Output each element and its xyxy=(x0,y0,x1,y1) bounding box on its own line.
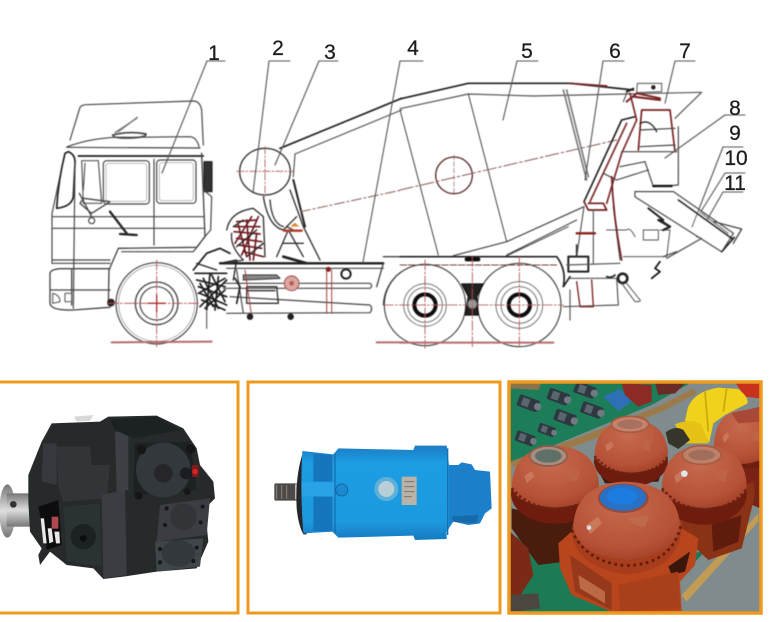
rear wheels xyxy=(384,264,466,346)
number 7: 7 xyxy=(679,40,691,63)
number 9: 9 xyxy=(729,122,741,145)
number 6: 6 xyxy=(609,40,621,63)
panel border xyxy=(509,382,761,613)
front bearing circle xyxy=(240,148,290,195)
lower plates xyxy=(157,498,210,542)
front wheel xyxy=(116,263,197,344)
motor body xyxy=(301,446,449,540)
chassis frame xyxy=(220,260,383,267)
cab roof xyxy=(70,101,203,145)
hopper xyxy=(638,110,675,152)
callout numbers xyxy=(208,37,748,195)
top valve xyxy=(74,415,93,422)
shaft flange xyxy=(0,484,15,538)
number 5: 5 xyxy=(521,40,533,63)
drum front xyxy=(280,98,402,148)
back right reducer xyxy=(678,482,755,560)
back left reducer xyxy=(512,485,602,565)
front reducer dome xyxy=(572,522,682,574)
back middle reducer xyxy=(593,462,665,483)
engine junction tangle xyxy=(193,248,230,273)
number 2: 2 xyxy=(272,37,284,60)
floor xyxy=(510,382,760,613)
number 4: 4 xyxy=(407,37,419,60)
panel: red planetary reducers photo xyxy=(509,381,773,613)
pump illustration xyxy=(0,415,215,579)
green shelf xyxy=(510,382,692,463)
number 1: 1 xyxy=(208,42,220,65)
front bumper xyxy=(50,269,110,310)
front blue cap xyxy=(598,484,649,513)
discharge chute xyxy=(635,192,733,252)
transfer case and small parts xyxy=(243,275,280,280)
ground line xyxy=(112,339,403,345)
truck mixer line drawing xyxy=(50,61,745,348)
pallet xyxy=(510,388,697,468)
panel: black hydraulic pump xyxy=(0,382,238,613)
recesses xyxy=(313,453,332,532)
mixer drum support xyxy=(277,190,320,260)
number 3: 3 xyxy=(324,41,336,64)
red indicator xyxy=(192,465,199,477)
right-most reducer xyxy=(714,410,760,468)
rear window xyxy=(157,160,196,203)
name plate xyxy=(402,477,417,505)
door window xyxy=(103,161,149,204)
number 8: 8 xyxy=(729,97,741,120)
front reducer base xyxy=(558,528,698,612)
side port xyxy=(71,524,96,549)
rear end cap xyxy=(447,462,492,532)
front lugs xyxy=(586,517,602,534)
mirror xyxy=(82,161,102,203)
hydraulic pump and motor tangle xyxy=(227,208,265,257)
brace bar xyxy=(563,90,588,180)
drum centre circle xyxy=(436,157,472,194)
round cover xyxy=(133,442,197,495)
cab body xyxy=(52,153,203,263)
drum segments xyxy=(400,94,507,255)
drum top xyxy=(400,83,633,99)
axle suspension xyxy=(462,284,483,315)
small pumps xyxy=(516,394,541,413)
panel: blue hydraulic motor xyxy=(248,382,500,613)
yellow gears xyxy=(685,388,748,443)
panel border xyxy=(248,382,500,613)
truck cab and chassis xyxy=(50,98,403,347)
label leader lines xyxy=(162,61,745,262)
panel border xyxy=(0,382,238,613)
cab rear edge xyxy=(204,162,212,192)
dark flange xyxy=(296,452,307,534)
number 11: 11 xyxy=(724,172,746,195)
white sticker xyxy=(38,500,62,550)
output shaft xyxy=(274,483,298,501)
number 10: 10 xyxy=(724,147,748,170)
rear frame xyxy=(400,257,570,287)
photo illustration xyxy=(510,381,773,613)
port plug xyxy=(336,484,348,496)
pedestal xyxy=(577,207,620,263)
motor illustration xyxy=(274,446,492,540)
chute support arm xyxy=(663,237,702,258)
rear wheel arch start xyxy=(383,272,402,305)
ladder xyxy=(584,117,635,202)
housing xyxy=(28,416,215,579)
drum rear and discharge xyxy=(383,83,742,348)
